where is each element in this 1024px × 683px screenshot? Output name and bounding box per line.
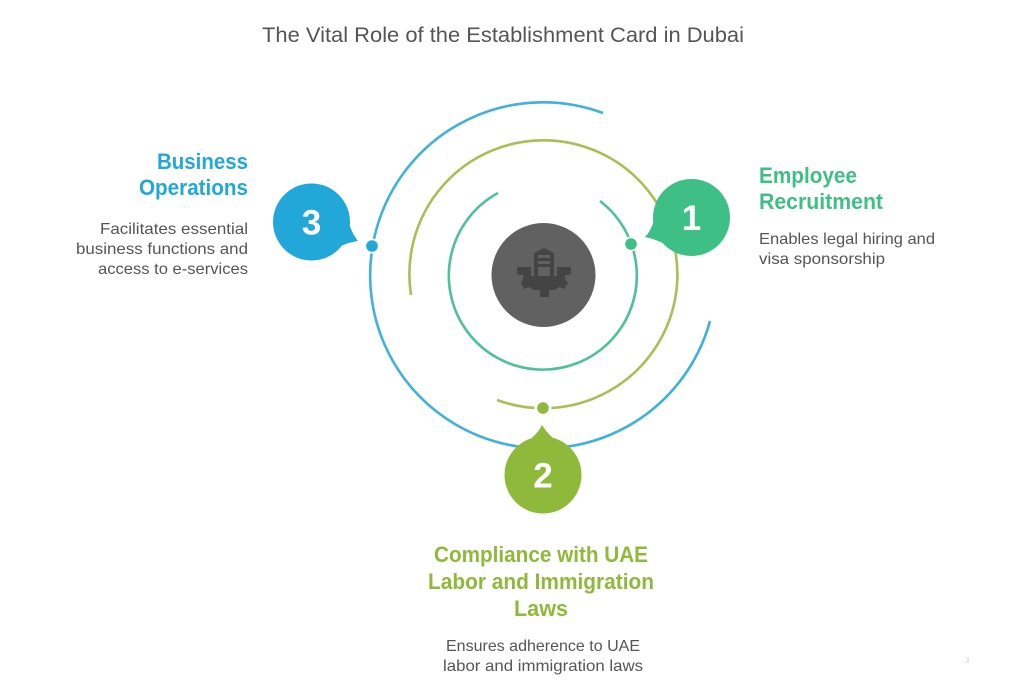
text: business description — [76, 221, 248, 278]
text: employee description: visa sponsorship — [759, 251, 885, 268]
faint corner mark — [965, 657, 968, 663]
bubble 1: 1 — [682, 199, 701, 238]
bubble 2 — [504, 425, 582, 514]
text: business description: business functions and — [76, 241, 248, 258]
bubble 1 — [645, 179, 730, 256]
text: compliance description — [443, 638, 643, 675]
bubble 3: 3 — [302, 204, 321, 242]
text: compliance description: Ensures adherence to UAE — [446, 638, 640, 655]
text: business description: Facilitates essential — [100, 221, 248, 238]
label: employee recruitment — [759, 163, 935, 268]
label: compliance: Compliance with UAE — [434, 542, 648, 567]
text: compliance description: labor and immigration laws — [443, 658, 643, 675]
label: compliance: Labor and Immigration — [428, 569, 654, 594]
bubble 3 — [273, 184, 358, 260]
center icon circle — [492, 223, 596, 327]
middle olive arc — [409, 140, 677, 408]
text: employee description — [759, 231, 935, 268]
text: business description: access to e-services — [98, 261, 248, 278]
label: employee recruitment: Employee — [759, 163, 857, 188]
text: employee description: Enables legal hiring and — [759, 231, 935, 248]
inner green arc — [449, 193, 637, 370]
label: compliance: Laws — [514, 596, 568, 621]
outer blue arc — [370, 102, 710, 448]
icon: building on gear — [517, 248, 571, 297]
label: business operations: Business — [157, 149, 248, 174]
dot: middle arc marker — [534, 400, 552, 416]
label: employee recruitment: Recruitment — [759, 189, 884, 214]
label: business operations — [76, 149, 248, 278]
label: business operations: Operations — [139, 175, 248, 200]
label: compliance — [428, 542, 654, 675]
dot: inner arc marker — [624, 236, 638, 252]
dot: outer arc marker — [364, 238, 380, 254]
title: The Vital Role of the Establishment Card in Dubai — [262, 23, 744, 47]
bubble 2: 2 — [533, 456, 553, 496]
